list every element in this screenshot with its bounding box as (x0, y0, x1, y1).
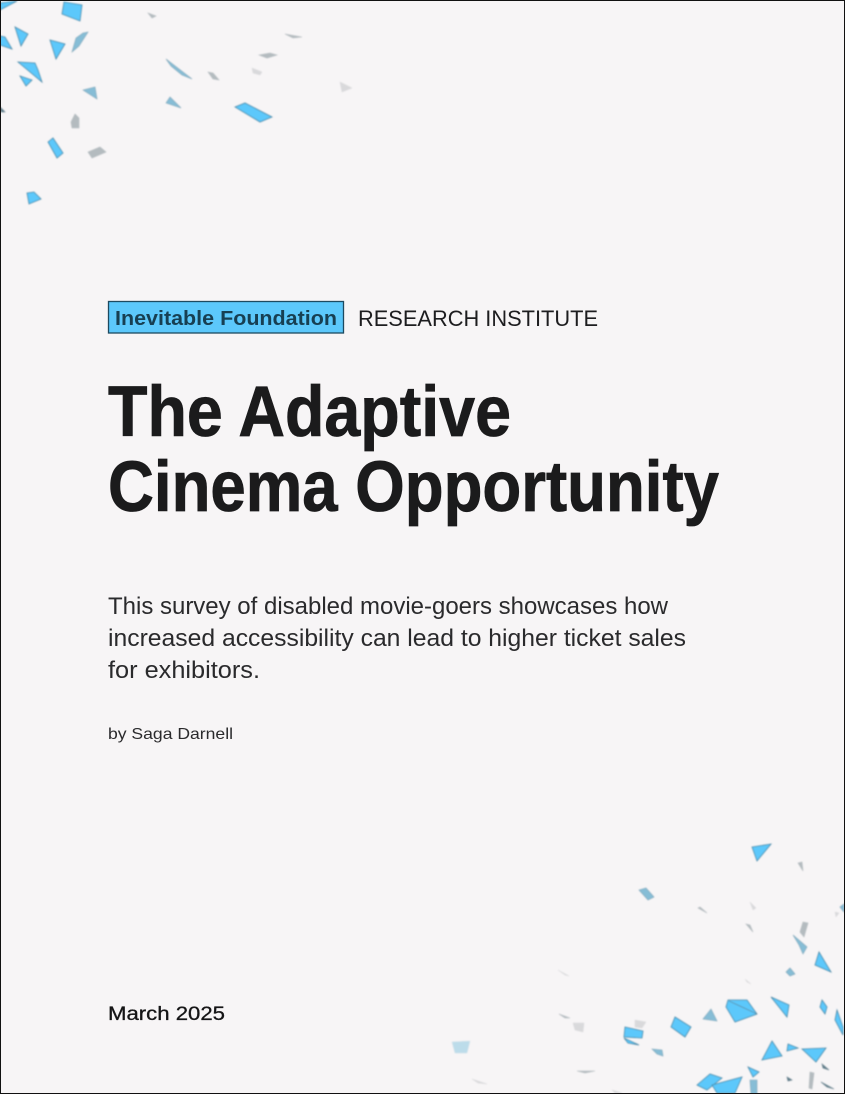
confetti: top-left cluster (0, 1, 352, 204)
author byline: by Saga Darnell (108, 726, 233, 743)
brand tag: Inevitable Foundation (108, 302, 344, 333)
intro text: for exhibitors. (108, 657, 260, 684)
intro text: This survey of disabled movie-goers showcases how (108, 593, 669, 620)
date: March 2025 (108, 1004, 225, 1025)
title: The Adaptive (108, 373, 511, 452)
intro text (108, 593, 686, 684)
title: Cinema Opportunity (108, 448, 719, 527)
title (108, 373, 719, 527)
confetti: bottom-right cluster (452, 844, 844, 1094)
brand tag: Inevitable Foundation: Inevitable Foundation (115, 308, 337, 330)
intro text: increased accessibility can lead to higher ticket sales (108, 625, 686, 652)
brand suffix: Research Institute: RESEARCH INSTITUTE (358, 306, 598, 331)
